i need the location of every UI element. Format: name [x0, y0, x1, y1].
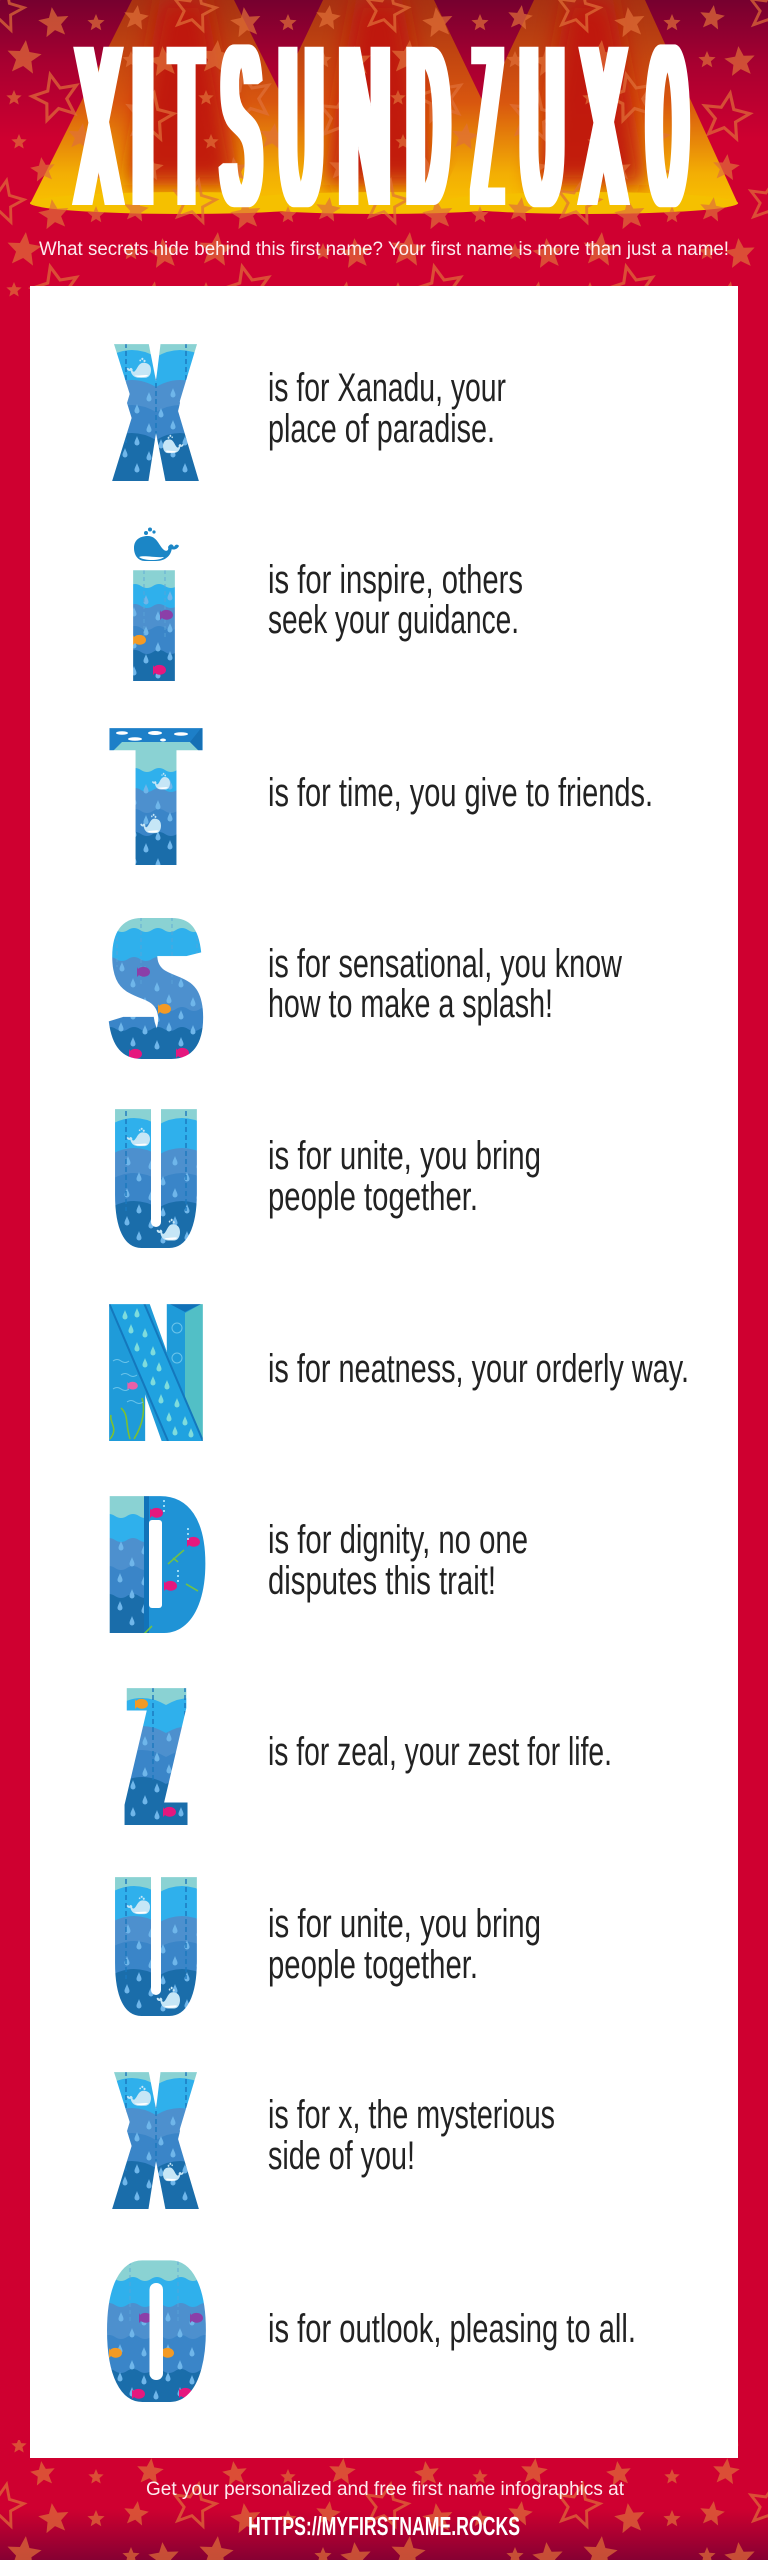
- text: X line: is for Xanadu, your: [268, 366, 506, 410]
- icon: letter O: [107, 2260, 206, 2402]
- icon: letter I: [133, 570, 175, 681]
- icon: letter D: [110, 1496, 206, 1633]
- row: T: [105, 722, 653, 984]
- icon: letter X second: [112, 2072, 199, 2209]
- text: U line: people together.: [268, 1175, 478, 1219]
- spotlight left: [30, 0, 336, 214]
- row: S: [104, 912, 622, 1179]
- icon: letter Z: [124, 1688, 188, 1825]
- text: I line: seek your guidance.: [268, 598, 519, 642]
- text: O line: is for outlook, pleasing to all.: [268, 2307, 636, 2351]
- title: N: [340, 0, 389, 254]
- text: I line: [268, 558, 523, 642]
- title: U: [281, 0, 321, 255]
- row: N: [104, 1298, 689, 1448]
- text: U second line: is for unite, you bring: [268, 1902, 541, 1946]
- title: Z: [476, 0, 499, 254]
- text: U second line: [268, 1902, 541, 1987]
- text: X line: place of paradise.: [268, 407, 495, 451]
- title: D: [409, 0, 447, 255]
- row: X: [108, 338, 506, 590]
- text: S line: how to make a splash!: [268, 982, 553, 1026]
- icon: letter S: [108, 918, 204, 1059]
- text: X line: [268, 366, 506, 451]
- title: X: [77, 0, 120, 254]
- spotlight right: [437, 0, 738, 214]
- row: Z: [118, 1682, 612, 1934]
- title: S: [223, 0, 259, 255]
- title: X: [582, 0, 625, 254]
- text: I line: is for inspire, others: [268, 558, 523, 602]
- title: I: [132, 0, 154, 255]
- row: D: [103, 1491, 528, 1746]
- text: X second line: side of you!: [268, 2134, 415, 2178]
- title: U: [522, 0, 562, 255]
- text: U line: is for unite, you bring: [268, 1134, 541, 1178]
- row: U second: [110, 1874, 541, 2126]
- row: I: [105, 528, 523, 802]
- row: U: [110, 1106, 541, 1358]
- text: S line: is for sensational, you know: [268, 942, 622, 986]
- text: Z line: is for zeal, your zest for life.: [268, 1730, 612, 1774]
- text: X second line: is for x, the mysterious: [268, 2093, 555, 2137]
- row: O: [107, 2260, 634, 2402]
- footer url: HTTPS://MYFIRSTNAME.ROCKS: [248, 2511, 520, 2541]
- text: U line: [268, 1134, 541, 1219]
- text: U second line: people together.: [268, 1943, 478, 1987]
- icon: letter T: [109, 728, 203, 865]
- text: D line: [268, 1518, 528, 1603]
- icon: letter U second: [115, 1877, 197, 2016]
- title: T: [172, 0, 201, 255]
- text: D line: disputes this trait!: [268, 1559, 496, 1603]
- subtitle: What secrets hide behind this first name? Your first name is more than just a name!: [39, 239, 729, 260]
- text: D line: is for dignity, no one: [268, 1518, 528, 1562]
- title: O: [650, 0, 685, 255]
- text: S line: [268, 942, 622, 1026]
- icon: whale dot: [134, 528, 179, 561]
- spotlight middle: [226, 0, 532, 214]
- icon: letter X: [112, 344, 199, 481]
- icon: letter N: [109, 1304, 203, 1441]
- footer text: Get your personalized and free first name infographics at: [146, 2479, 625, 2500]
- text: X second line: [268, 2093, 555, 2178]
- spotlights: [30, 0, 738, 214]
- row: X second: [108, 2066, 555, 2318]
- icon: letter U: [115, 1109, 197, 1248]
- title: [77, 0, 685, 255]
